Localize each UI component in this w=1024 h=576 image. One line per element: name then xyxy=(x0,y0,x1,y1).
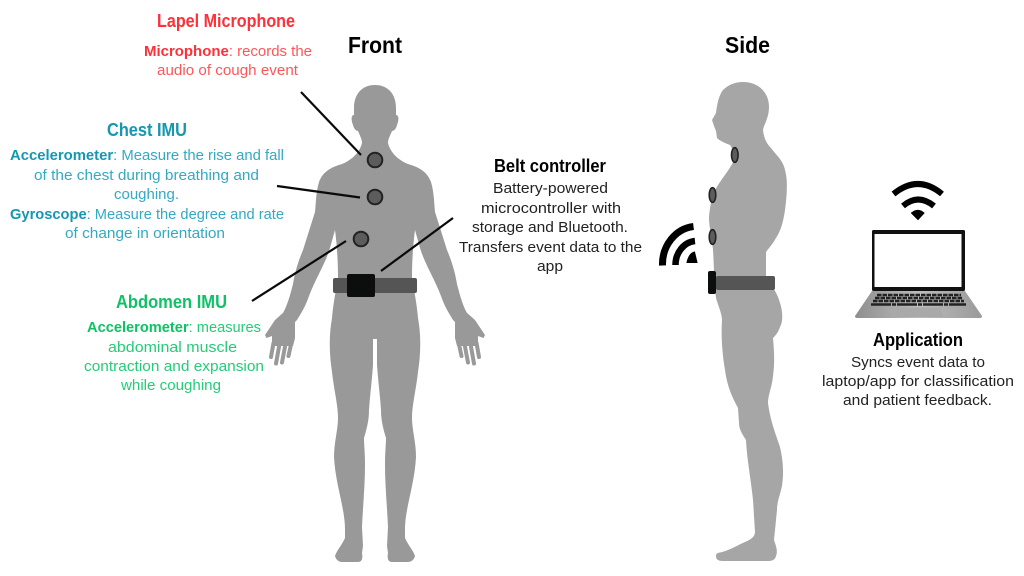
text block: lapel microphone xyxy=(144,11,312,79)
text block: chest IMU: Gyroscope: Measure the degree and rate xyxy=(10,206,284,223)
sensor: abdomen IMU, side xyxy=(709,230,716,244)
sensor: lapel microphone, front xyxy=(368,153,382,167)
text block: abdomen IMU xyxy=(84,292,264,394)
text block: belt controller: storage and Bluetooth. xyxy=(472,219,628,236)
text block: application: and patient feedback. xyxy=(843,392,992,409)
text block: chest IMU: Accelerometer: Measure the rise and fall xyxy=(10,147,284,164)
text block: belt controller: app xyxy=(537,258,563,275)
text block: chest IMU: of the chest during breathing and xyxy=(34,167,259,184)
text block: chest IMU: coughing. xyxy=(114,186,179,203)
leader line: belt controller xyxy=(381,218,453,271)
sensor: lapel microphone, side xyxy=(732,148,738,162)
sensor: abdomen IMU, front xyxy=(354,232,368,246)
text block: application: Application xyxy=(873,330,963,350)
text block: chest IMU: Chest IMU xyxy=(107,120,187,140)
text block: abdomen IMU: Accelerometer: measures xyxy=(87,319,261,336)
figure: front body silhouette xyxy=(265,85,485,562)
text block: application xyxy=(822,330,1014,409)
figure: side body silhouette xyxy=(709,82,787,561)
belt: side view xyxy=(708,271,775,294)
text block: lapel microphone: audio of cough event xyxy=(157,62,299,79)
text block: belt controller xyxy=(459,156,642,275)
text block: abdomen IMU: while coughing xyxy=(120,377,221,394)
text block: lapel microphone: Microphone: records the xyxy=(144,43,312,60)
leader line: abdomen IMU xyxy=(252,241,346,301)
icon: laptop xyxy=(855,230,982,318)
text block: chest IMU: of change in orientation xyxy=(65,225,225,242)
text block: belt controller: Transfers event data to the xyxy=(459,239,642,256)
sensor: chest IMU, side xyxy=(709,188,716,202)
text block: abdomen IMU: Abdomen IMU xyxy=(116,292,227,312)
text block: belt controller: Battery-powered xyxy=(493,180,608,197)
icon: laptop wifi xyxy=(894,184,942,220)
leader line: chest IMU xyxy=(277,186,360,198)
text block: application: laptop/app for classification xyxy=(822,373,1014,390)
sensor: chest IMU, front xyxy=(368,190,382,204)
text block: abdomen IMU: contraction and expansion xyxy=(84,358,264,375)
heading: Front: Front xyxy=(348,32,402,58)
text block: lapel microphone: Lapel Microphone xyxy=(157,11,295,31)
text block: application: Syncs event data to xyxy=(851,354,985,371)
leader line: microphone xyxy=(301,92,361,155)
heading: Side: Side xyxy=(725,32,770,58)
text block: belt controller: microcontroller with xyxy=(481,200,621,217)
text block: belt controller: Belt controller xyxy=(494,156,606,176)
text block: chest IMU xyxy=(10,120,284,242)
text block: abdomen IMU: abdominal muscle xyxy=(108,339,237,356)
belt: front view xyxy=(333,274,417,297)
icon: belt wireless signal xyxy=(662,226,697,266)
